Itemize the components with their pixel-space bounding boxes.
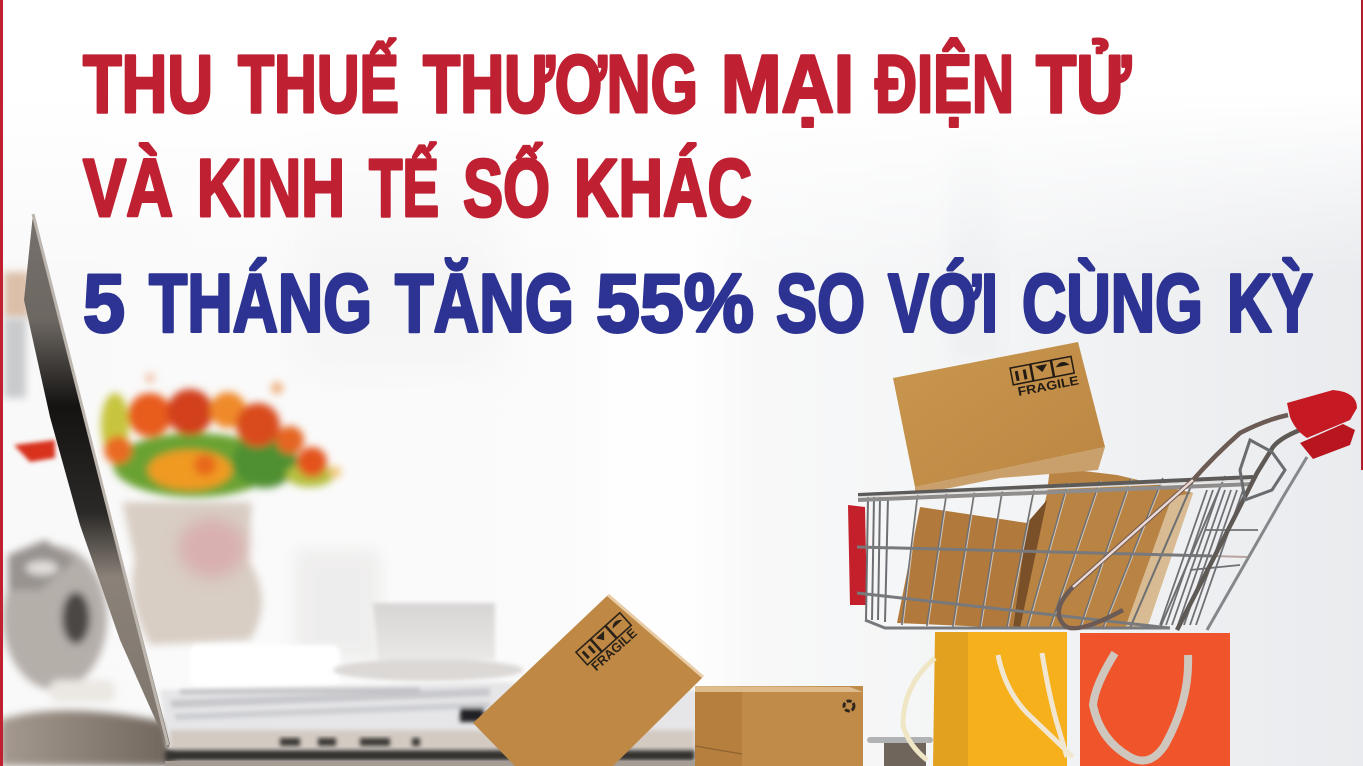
fragile box on top of cart xyxy=(893,342,1105,495)
title: red heading: THUẾ xyxy=(238,39,399,130)
title: red heading: THƯƠNG xyxy=(423,39,698,130)
blurred camera xyxy=(3,540,115,702)
title: red heading: THU xyxy=(83,39,213,130)
title: blue subheading: CÙNG xyxy=(1022,256,1203,350)
title: blue subheading: KỲ xyxy=(1227,256,1313,350)
title: red heading xyxy=(83,39,1132,234)
red cart handle xyxy=(1287,390,1357,459)
title: blue subheading: TĂNG xyxy=(395,256,574,350)
title: red heading: KINH xyxy=(197,143,345,234)
title: red heading: KHÁC xyxy=(574,143,752,234)
shopping bag: orange xyxy=(1080,633,1230,766)
cardboard box: fragile front left xyxy=(473,595,703,766)
background objects behind laptop xyxy=(4,272,55,462)
title: blue subheading: VỚI xyxy=(888,256,998,350)
silver plate stack under cart xyxy=(867,737,933,766)
fragile box on top of cart: FRAGILE xyxy=(1016,373,1080,399)
shopping cart xyxy=(848,415,1307,630)
title: red heading: TỬ xyxy=(1036,39,1132,130)
red left border xyxy=(0,0,3,766)
blurred flowers xyxy=(101,373,341,497)
cardboard box: small front xyxy=(695,686,863,766)
title: blue subheading: 5 xyxy=(83,256,125,350)
cart boxes xyxy=(897,467,1193,628)
dark red right border xyxy=(1361,0,1363,470)
title: blue subheading: SO xyxy=(776,256,865,350)
title: blue subheading: 55% xyxy=(596,256,754,350)
laptop lid xyxy=(24,214,170,748)
shopping bag: yellow xyxy=(903,632,1073,766)
title: blue subheading xyxy=(83,256,1313,350)
title: blue subheading: THÁNG xyxy=(149,256,372,350)
laptop keyboard base xyxy=(160,682,700,766)
flower vase xyxy=(122,502,380,687)
title: red heading: ĐIỆN xyxy=(875,39,1014,130)
cardboard box: fragile front left: FRAGILE xyxy=(588,625,640,674)
table edge xyxy=(0,710,175,766)
title: red heading: TẾ xyxy=(369,143,439,234)
blurred coffee cup xyxy=(333,603,523,681)
title: red heading: SỐ xyxy=(463,143,550,234)
title: red heading: VÀ xyxy=(83,143,173,234)
title: red heading: MẠI xyxy=(721,39,854,130)
